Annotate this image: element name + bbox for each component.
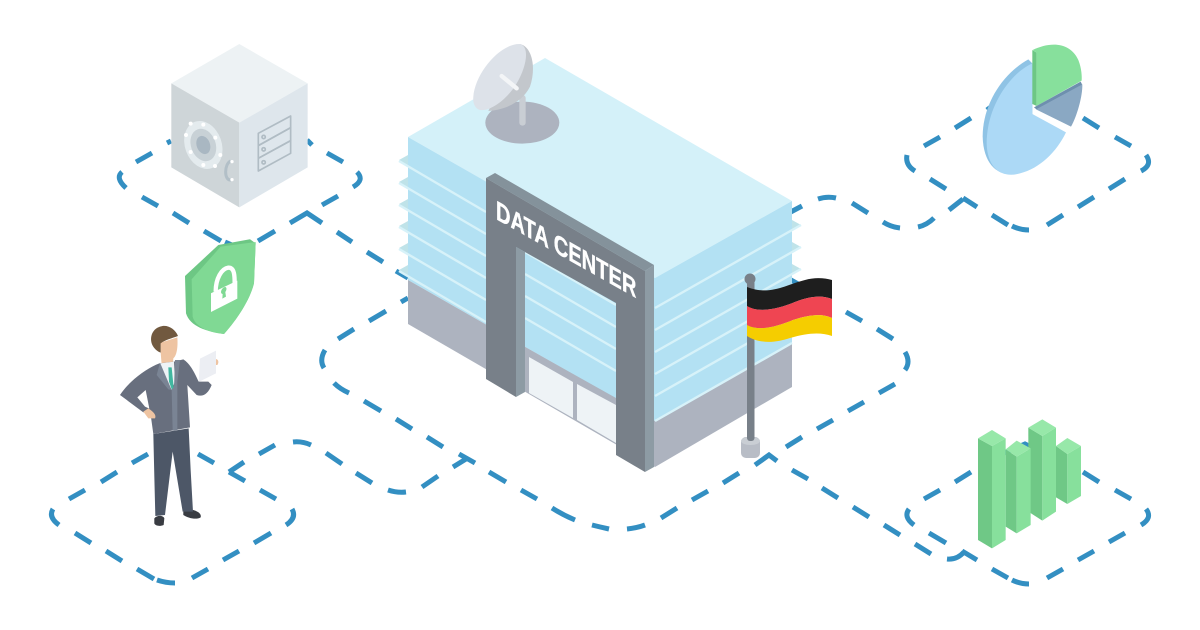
shoes xyxy=(154,510,201,526)
dashed path around person xyxy=(51,454,294,583)
flag pole xyxy=(741,274,760,458)
flag stripes xyxy=(747,278,832,342)
column 2 xyxy=(1006,441,1031,533)
dashed connection paths xyxy=(51,100,1149,584)
safe handle xyxy=(226,160,234,181)
column 1 xyxy=(978,430,1006,548)
pie slate slice xyxy=(1034,82,1082,127)
safe dial xyxy=(178,116,229,174)
dashed link from safe to building xyxy=(337,232,408,278)
window fins xyxy=(399,155,801,421)
server rack symbol xyxy=(258,116,291,171)
column 3 xyxy=(1028,419,1056,521)
gap between arm and torso xyxy=(137,390,149,409)
column 4 xyxy=(1056,438,1081,504)
trousers xyxy=(153,428,193,516)
building concrete base xyxy=(408,280,792,467)
building roof xyxy=(408,58,792,278)
dashed path around pie chart xyxy=(907,100,1149,230)
flag of Germany on pole xyxy=(741,274,832,458)
sign text: DATA CENTER xyxy=(496,195,636,305)
figure: businessman holding document xyxy=(120,326,218,526)
chart icon: pie chart xyxy=(983,45,1082,175)
building: data center xyxy=(399,44,801,472)
dashed path around building xyxy=(322,276,908,529)
dashed path around bar chart xyxy=(907,444,1149,584)
icon: safe xyxy=(171,44,308,207)
padlock xyxy=(211,268,237,312)
dashed link to bar chart xyxy=(792,470,964,559)
icon: security shield with padlock xyxy=(185,239,256,334)
pie green slice xyxy=(1032,45,1082,106)
dashed link to pie chart xyxy=(785,197,963,228)
pie blue slice xyxy=(983,59,1066,175)
chart icon: bar columns xyxy=(978,419,1081,548)
entrance doors xyxy=(525,347,616,443)
portal frame xyxy=(486,173,654,472)
dashed link from person to building path xyxy=(229,442,466,492)
hand on hip xyxy=(143,408,155,418)
building glass walls xyxy=(408,137,792,421)
satellite dish xyxy=(473,44,559,144)
paper and hand xyxy=(199,351,218,382)
head and hair xyxy=(151,326,178,368)
jacket xyxy=(120,359,212,434)
shirt and tie xyxy=(157,360,180,431)
dashed path around safe xyxy=(119,140,360,245)
